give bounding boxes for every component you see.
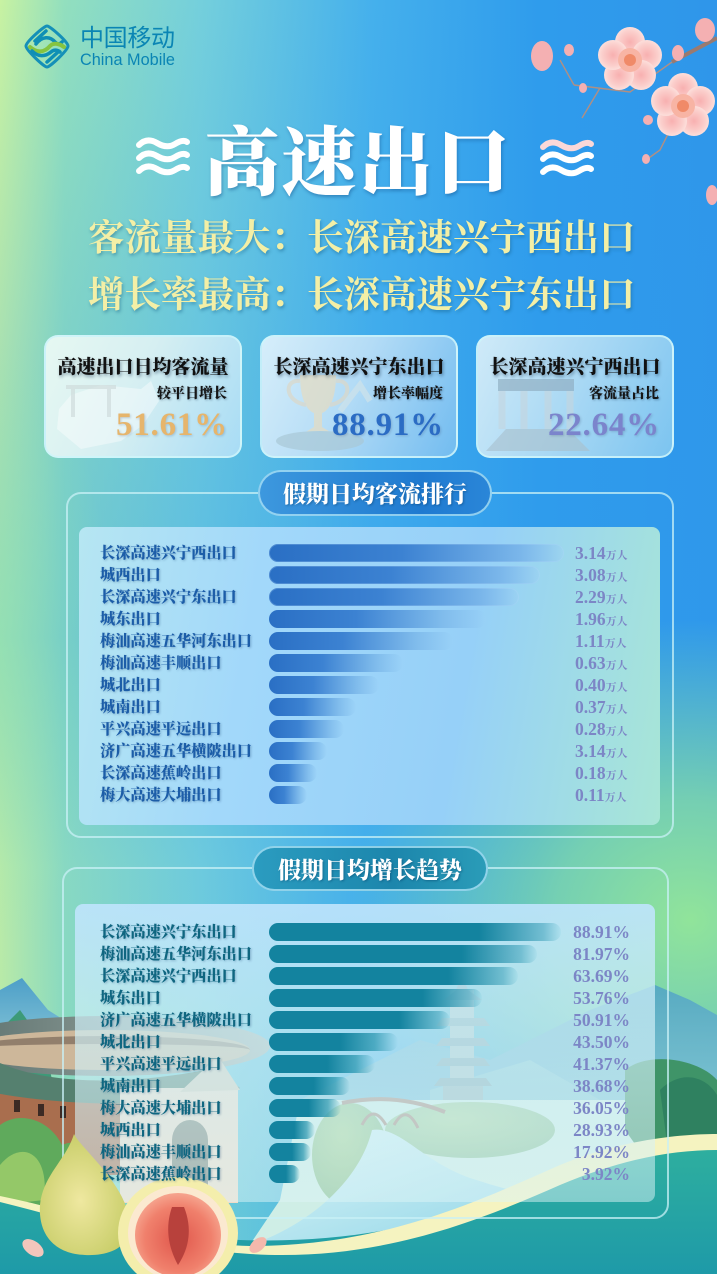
row 8 <box>100 696 628 717</box>
tulou <box>0 1016 270 1203</box>
row 7 <box>100 674 628 695</box>
row 8: 0.37万人 <box>575 697 628 717</box>
row 3: 长深高速兴宁西出口 <box>100 965 237 986</box>
row 11 <box>100 1141 630 1162</box>
card value: 88.91% <box>332 407 444 443</box>
card title: 长深高速兴宁西出口 <box>489 352 660 379</box>
flowers <box>598 27 662 90</box>
sea band and ribbon <box>0 1134 717 1274</box>
row 8: 城南出口 <box>100 1075 161 1096</box>
row 12 <box>100 784 627 805</box>
row 12: 3.92% <box>582 1164 630 1184</box>
card: west exit share <box>476 335 674 458</box>
icon: toll station <box>486 379 590 451</box>
row 2 <box>100 943 630 964</box>
row 3: 长深高速兴宁东出口 <box>100 586 237 607</box>
card title: 高速出口日均客流量 <box>57 352 228 379</box>
row 11: 长深高速蕉岭出口 <box>100 762 222 783</box>
row 1: 长深高速兴宁东出口 <box>100 921 237 942</box>
row 10: 城西出口 <box>100 1119 161 1140</box>
card value: 22.64% <box>548 407 660 443</box>
row 4: 1.96万人 <box>575 609 628 629</box>
row 7: 41.37% <box>573 1054 630 1074</box>
row 12 <box>100 1163 630 1184</box>
row 3: 63.69% <box>573 966 630 986</box>
whole pomelo <box>40 1134 130 1255</box>
row 4: 53.76% <box>573 988 630 1008</box>
logo: China Mobile <box>24 20 175 69</box>
row 10: 济广高速五华横陂出口 <box>100 740 252 761</box>
pagoda <box>434 975 492 1100</box>
row 2 <box>100 564 628 585</box>
row 6: 43.50% <box>573 1032 630 1052</box>
row 6: 梅汕高速丰顺出口 <box>100 652 222 673</box>
card subtitle: 增长率幅度 <box>373 383 443 403</box>
row 8: 城南出口 <box>100 696 161 717</box>
logo: China Mobile: China Mobile <box>80 50 175 69</box>
card value: 51.61% <box>116 407 228 443</box>
row 12: 梅大高速大埔出口 <box>100 784 222 805</box>
row 9: 梅大高速大埔出口 <box>100 1097 222 1118</box>
bar chart: flow ranking <box>100 542 628 805</box>
row 8 <box>100 1075 630 1096</box>
row 7 <box>100 1053 630 1074</box>
row 4 <box>100 987 630 1008</box>
river valley <box>230 1059 717 1274</box>
icon: waves right <box>540 139 594 176</box>
card title: 长深高速兴宁东出口 <box>273 352 444 379</box>
icon: waves left <box>136 137 190 176</box>
row 2: 3.08万人 <box>575 565 628 585</box>
panel: holiday daily growth trend <box>62 846 669 1219</box>
row 11: 0.18万人 <box>575 763 628 783</box>
row 11 <box>100 762 628 783</box>
icon: trophy <box>276 375 372 451</box>
heading pill: ranking <box>258 470 492 516</box>
row 1 <box>100 542 628 563</box>
scenery: mountains, tulou, pagoda, river <box>0 978 717 1274</box>
logo mark <box>26 26 68 67</box>
row 1: 3.14万人 <box>575 543 628 563</box>
row 1 <box>100 921 630 942</box>
cut pomelo <box>118 1177 238 1274</box>
blossom branch <box>531 18 717 205</box>
row 7: 城北出口 <box>100 674 161 695</box>
heading pill: trend: 假期日均增长趋势 <box>278 852 462 885</box>
row 2: 梅汕高速五华河东出口 <box>100 943 252 964</box>
row 4: 城东出口 <box>100 608 161 629</box>
row 9: 36.05% <box>573 1098 630 1118</box>
row 11: 17.92% <box>573 1142 630 1162</box>
row 10 <box>100 740 628 761</box>
row 4 <box>100 608 628 629</box>
row 5: 济广高速五华横陂出口 <box>100 1009 252 1030</box>
row 6 <box>100 652 628 673</box>
heading pill: ranking: 假期日均客流排行 <box>283 476 467 509</box>
mountains <box>0 978 717 1190</box>
row 5: 1.11万人 <box>575 631 627 651</box>
heading pill: trend <box>252 846 488 891</box>
row 6: 城北出口 <box>100 1031 161 1052</box>
buds <box>531 18 717 205</box>
row 9 <box>100 718 628 739</box>
row 5: 梅汕高速五华河东出口 <box>100 630 252 651</box>
row 5 <box>100 1009 630 1030</box>
headline: highest growth: 增长率最高：长深高速兴宁东出口 <box>88 266 636 318</box>
row 8: 38.68% <box>573 1076 630 1096</box>
bridge <box>342 1099 445 1128</box>
row 3: 2.29万人 <box>575 587 628 607</box>
foliage <box>0 1118 92 1215</box>
row 3 <box>100 965 630 986</box>
row 5: 50.91% <box>573 1010 630 1030</box>
row 1: 88.91% <box>573 922 630 942</box>
row 10: 28.93% <box>573 1120 630 1140</box>
card subtitle: 较平日增长 <box>157 383 227 403</box>
branches <box>560 60 680 160</box>
row 5 <box>100 630 627 651</box>
headline: largest flow: 客流量最大：长深高速兴宁西出口 <box>88 209 636 261</box>
row 12: 0.11万人 <box>575 785 627 805</box>
row 3 <box>100 586 628 607</box>
row 4: 城东出口 <box>100 987 161 1008</box>
card: daily average flow <box>44 335 242 458</box>
row 7: 0.40万人 <box>575 675 628 695</box>
row 6: 0.63万人 <box>575 653 628 673</box>
row 12: 长深高速蕉岭出口 <box>100 1163 222 1184</box>
row 2: 城西出口 <box>100 564 161 585</box>
row 6 <box>100 1031 630 1052</box>
row 9: 0.28万人 <box>575 719 628 739</box>
row 1: 长深高速兴宁西出口 <box>100 542 237 563</box>
illustration: pomelos and petals <box>22 1134 267 1274</box>
row 2: 81.97% <box>573 944 630 964</box>
petals <box>19 1235 47 1261</box>
card subtitle: 客流量占比 <box>589 383 659 403</box>
row 9 <box>100 1097 630 1118</box>
row 9: 平兴高速平远出口 <box>100 718 222 739</box>
row 7: 平兴高速平远出口 <box>100 1053 222 1074</box>
panel: holiday daily flow ranking <box>66 470 674 838</box>
row 10 <box>100 1119 630 1140</box>
card: east exit growth <box>260 335 458 458</box>
row 10: 3.14万人 <box>575 741 628 761</box>
title: 高速出口 <box>204 104 512 211</box>
row 11: 梅汕高速丰顺出口 <box>100 1141 222 1162</box>
icon: map <box>57 381 159 449</box>
